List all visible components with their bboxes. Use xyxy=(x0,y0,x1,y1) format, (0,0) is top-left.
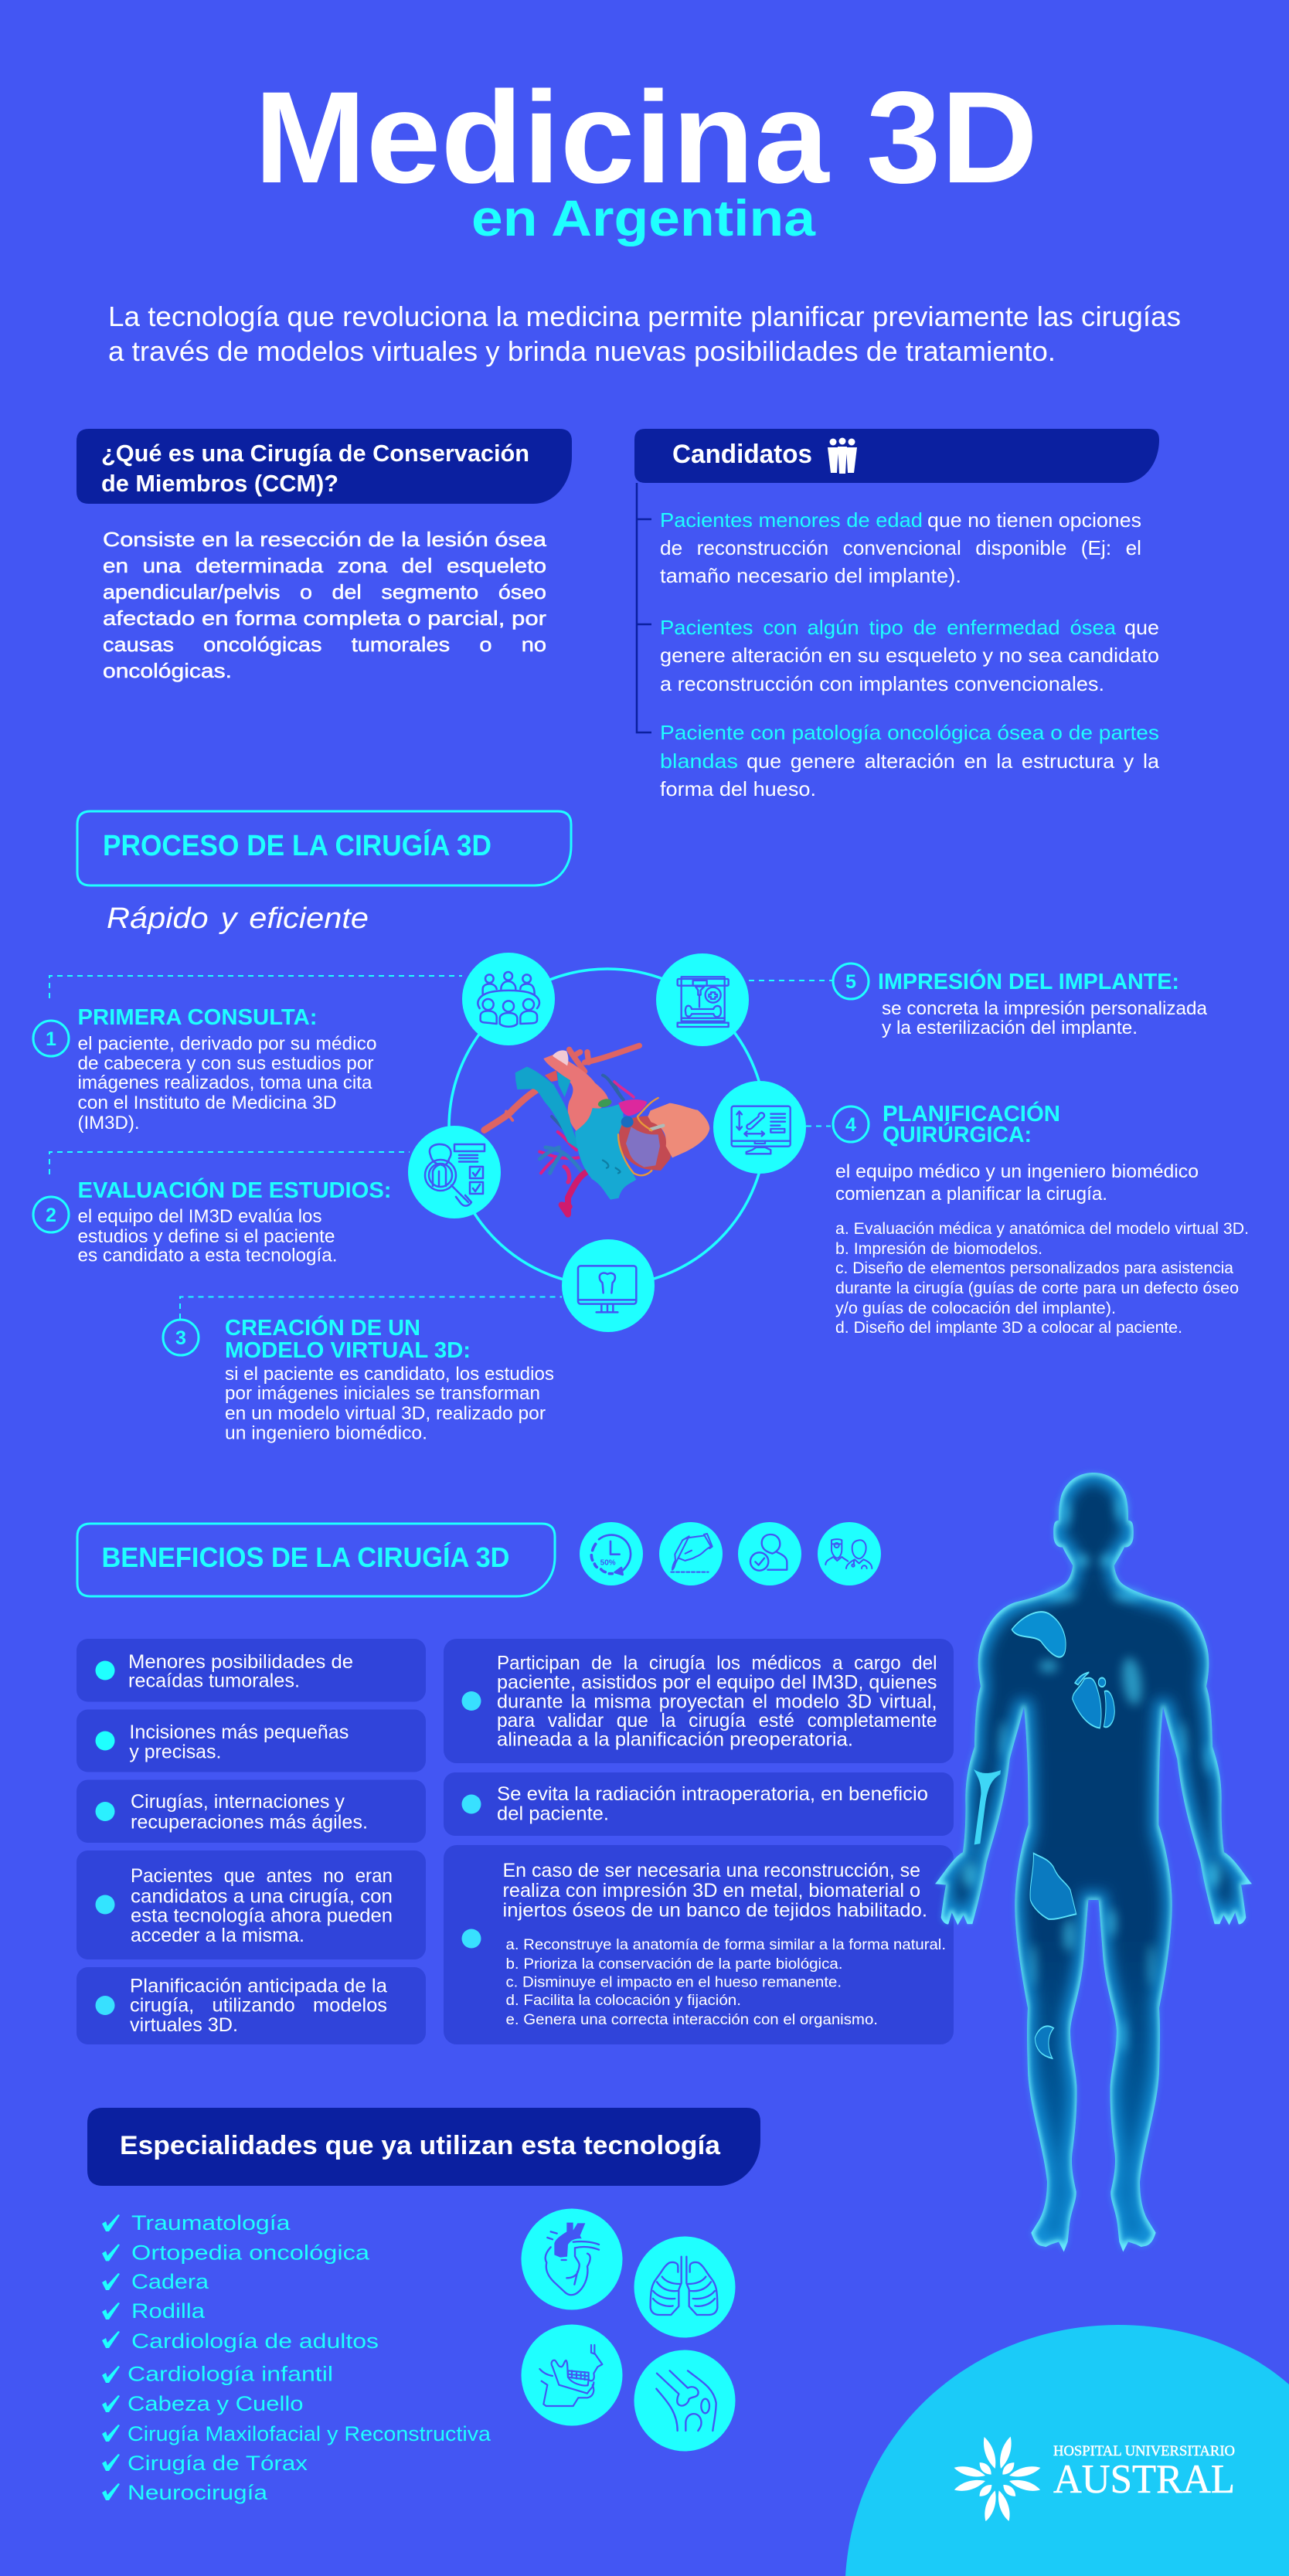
benefit card 6: para validar que la cirugía esté completamente xyxy=(497,1710,937,1731)
benefit card 6: paciente, asistidos por el equipo del IM3D, quienes xyxy=(497,1672,937,1694)
organ: forearm bone xyxy=(974,1769,1001,1844)
benefit card 8: e. Genera una correcta interacción con el organismo. xyxy=(505,2012,878,2028)
step 4 xyxy=(833,1100,1249,1337)
outer glow xyxy=(935,1473,1252,2251)
check xyxy=(102,2244,120,2261)
step list: durante la cirugía (guías de corte para un defecto óseo xyxy=(835,1280,1239,1297)
dark interior xyxy=(935,1473,1252,2251)
icon: people xyxy=(828,437,857,474)
step 5 xyxy=(833,963,1208,1038)
step heading: PLANIFICACIÓN xyxy=(883,1100,1060,1127)
candidate 1: de reconstrucción convencional disponible (Ej: el xyxy=(660,536,1141,559)
definition text: oncológicas. xyxy=(103,659,232,682)
intro text: La tecnología que revoluciona la medicina permite planificar previamente las cirugías xyxy=(108,301,1181,332)
benefit card 1: Menores posibilidades de xyxy=(128,1651,353,1673)
icon: heart specialty xyxy=(521,2208,623,2310)
ring xyxy=(449,969,766,1286)
check xyxy=(102,2395,120,2412)
title: Medicina 3D xyxy=(254,64,1038,210)
specialties list: Cadera xyxy=(131,2270,209,2293)
definition text: afectado en forma completa o parcial, por xyxy=(103,607,546,630)
candidate 1 xyxy=(660,508,1141,587)
benefit card 4: Pacientes que antes no eran xyxy=(131,1865,393,1887)
panel: candidatos xyxy=(634,429,1160,800)
organ: scapula xyxy=(1012,1612,1066,1657)
step list: y/o guías de colocación del implante). xyxy=(835,1300,1116,1317)
number badge xyxy=(833,1106,869,1142)
number badge: 3 xyxy=(175,1327,186,1349)
icon: 50 percent clock: 50% xyxy=(600,1559,616,1568)
heading text xyxy=(101,440,529,497)
number badge xyxy=(833,963,869,999)
benefit card 5: Planificación anticipada de la xyxy=(130,1976,387,1997)
benefit card 8: injertos óseos de un banco de tejidos habilitado. xyxy=(502,1900,927,1922)
organ: heart xyxy=(1073,1672,1114,1728)
step text: estudios y define si el paciente xyxy=(77,1226,335,1247)
step heading: CREACIÓN DE UN xyxy=(225,1314,420,1341)
panel: benefits left column xyxy=(77,1639,426,2044)
step heading: MODELO VIRTUAL 3D: xyxy=(225,1338,471,1363)
step text: con el Instituto de Medicina 3D xyxy=(77,1093,337,1113)
candidate 1: tamaño necesario del implante). xyxy=(660,564,961,587)
organ: pelvis xyxy=(1030,1854,1076,1919)
candidate 2: genere alteración en su esqueleto y no sea candidato xyxy=(660,644,1159,667)
step text xyxy=(835,1161,1199,1205)
icon: doctors xyxy=(818,1522,881,1585)
benefit card 8 xyxy=(444,1845,954,2044)
panel: benefits right column xyxy=(444,1639,954,2044)
muscle highlights xyxy=(962,1495,1221,2052)
benefit card 2: y precisas. xyxy=(129,1742,221,1763)
icon: 50 percent clock xyxy=(580,1522,643,1585)
icon: meeting xyxy=(462,953,555,1045)
definition text: apendicular/pelvis o del segmento óseo xyxy=(103,580,546,603)
step heading: PRIMERA CONSULTA: xyxy=(77,1005,317,1030)
logo text: HOSPITAL UNIVERSITARIO xyxy=(1053,2443,1235,2459)
benefit card 7: Se evita la radiación intraoperatoria, en beneficio xyxy=(497,1783,928,1805)
specialties list: Traumatología xyxy=(131,2211,291,2234)
icon: surgical planning monitor xyxy=(713,1081,806,1174)
step 2 xyxy=(33,1177,392,1266)
step list: c. Diseño de elementos personalizados para asistencia xyxy=(835,1259,1233,1277)
benefit card 4: acceder a la misma. xyxy=(131,1925,304,1946)
benefit card 2 xyxy=(77,1709,426,1772)
step list: a. Evaluación médica y anatómica del modelo virtual 3D. xyxy=(835,1220,1249,1238)
candidate 1: Pacientes menores de edad xyxy=(660,508,923,532)
intro text xyxy=(108,301,1181,367)
benefit card 3 xyxy=(77,1780,426,1843)
benefit card 1: recaídas tumorales. xyxy=(128,1670,300,1692)
number badge: 4 xyxy=(845,1114,856,1136)
step 1 xyxy=(33,1005,377,1133)
step text: y la esterilización del implante. xyxy=(882,1018,1138,1038)
dashed connectors xyxy=(49,976,832,1319)
benefit card 5 xyxy=(77,1967,426,2044)
candidate 2: Pacientes con algún tipo de enfermedad ósea xyxy=(660,616,1117,639)
human body illustration xyxy=(935,1473,1252,2251)
heading: proceso xyxy=(77,811,571,885)
check xyxy=(102,2331,120,2348)
heading: proceso: PROCESO DE LA CIRUGÍA 3D xyxy=(103,828,491,862)
icon: 3D printer xyxy=(656,953,749,1046)
step text xyxy=(77,1206,338,1266)
benefit card 3: recuperaciones más ágiles. xyxy=(131,1812,368,1833)
benefit card 8: realiza con impresión 3D en metal, biomaterial o xyxy=(502,1880,920,1901)
specialties list: Rodilla xyxy=(131,2299,206,2323)
step text: si el paciente es candidato, los estudios xyxy=(225,1364,554,1385)
icon: knee specialty xyxy=(634,2350,736,2451)
specialties list: Ortopedia oncológica xyxy=(131,2241,370,2264)
benefit card 8: En caso de ser necesaria una reconstrucción, se xyxy=(502,1860,920,1881)
candidate 3: que genere alteración en la estructura y la xyxy=(747,749,1160,773)
heading: especialidades: Especialidades que ya utilizan esta tecnología xyxy=(120,2131,721,2160)
benefit card 6: durante la misma proyectan el modelo 3D virtual, xyxy=(497,1691,937,1712)
candidate 2: que xyxy=(1124,616,1159,639)
benefit card 8: d. Facilita la colocación y fijación. xyxy=(505,1993,741,2009)
definition text: Consiste en la resección de la lesión ósea xyxy=(103,528,547,551)
benefit card 7 xyxy=(444,1772,954,1836)
check xyxy=(102,2214,120,2231)
icon: patient check xyxy=(738,1522,801,1585)
candidate 2: a reconstrucción con implantes convencionales. xyxy=(660,672,1104,695)
logo text: AUSTRAL xyxy=(1053,2457,1235,2502)
step heading xyxy=(225,1314,471,1363)
step text: de cabecera y con sus estudios por xyxy=(77,1053,374,1074)
number badge xyxy=(163,1320,199,1355)
benefit card 5: virtuales 3D. xyxy=(130,2014,238,2036)
3D heart model xyxy=(485,1045,709,1215)
step 3 xyxy=(163,1314,554,1443)
step text xyxy=(225,1364,554,1443)
connector bracket xyxy=(637,483,651,732)
intro text: a través de modelos virtuales y brinda nuevas posibilidades de tratamiento. xyxy=(108,335,1056,367)
benefit card 8: a. Reconstruye la anatomía de forma similar a la forma natural. xyxy=(505,1937,946,1953)
icon: evaluation xyxy=(408,1126,501,1218)
step text: el paciente, derivado por su médico xyxy=(77,1034,377,1054)
definition text: en una determinada zona del esqueleto xyxy=(103,554,546,577)
definition text: causas oncológicas tumorales o no xyxy=(103,633,546,656)
check xyxy=(102,2366,120,2383)
step text xyxy=(882,998,1208,1038)
benefit card 7: del paciente. xyxy=(497,1803,609,1825)
number badge: 2 xyxy=(46,1205,56,1226)
icon: lungs specialty xyxy=(634,2236,736,2338)
heading: beneficios: BENEFICIOS DE LA CIRUGÍA 3D xyxy=(102,1541,510,1573)
benefit card 8: c. Disminuye el impacto en el hueso remanente. xyxy=(505,1975,842,1991)
step heading: QUIRÚRGICA: xyxy=(883,1121,1032,1147)
benefit card 3: Cirugías, internaciones y xyxy=(131,1791,345,1813)
heading text: ¿Qué es una Cirugía de Conservación xyxy=(101,440,529,467)
heading box xyxy=(77,429,572,504)
icon: virtual model monitor xyxy=(562,1239,655,1332)
check xyxy=(102,2273,120,2290)
step text: por imágenes iniciales se transforman xyxy=(225,1383,540,1404)
step text xyxy=(77,1034,377,1133)
candidate 3 xyxy=(660,721,1160,800)
mid blue layer xyxy=(935,1473,1252,2251)
benefit card 5: cirugía, utilizando modelos xyxy=(130,1995,387,2017)
check xyxy=(102,2454,120,2471)
candidate 1: que no tienen opciones xyxy=(927,508,1141,532)
icon: jaw specialty xyxy=(521,2324,623,2426)
benefit card 6: alineada a la planificación preoperatoria. xyxy=(497,1729,853,1751)
specialties list xyxy=(102,2211,491,2504)
candidate 3: Paciente con patología oncológica ósea o de partes xyxy=(660,721,1159,744)
corner circle xyxy=(845,2325,1289,2576)
step text: el equipo del IM3D evalúa los xyxy=(77,1206,321,1227)
specialties list: Cirugía Maxilofacial y Reconstructiva xyxy=(128,2422,491,2445)
specialties list: Cardiología infantil xyxy=(128,2363,333,2386)
step text: un ingeniero biomédico. xyxy=(225,1423,427,1443)
number badge: 5 xyxy=(845,971,856,993)
specialties list: Cardiología de adultos xyxy=(131,2330,379,2353)
definition text xyxy=(103,528,547,682)
step list xyxy=(835,1220,1249,1337)
benefit card 4 xyxy=(77,1850,426,1959)
panel: que es CCM xyxy=(77,429,572,682)
candidate 3: blandas xyxy=(660,749,738,773)
bright silhouette edge xyxy=(935,1473,1252,2251)
benefit card 6: Participan de la cirugía los médicos a cargo del xyxy=(497,1653,937,1674)
step text: se concreta la impresión personalizada xyxy=(882,998,1208,1019)
step text: el equipo médico y un ingeniero biomédico xyxy=(835,1161,1199,1182)
subtitle: en Argentina xyxy=(471,189,816,246)
candidate 2 xyxy=(660,616,1159,695)
heading text: Candidatos xyxy=(672,440,812,469)
benefit card 2: Incisiones más pequeñas xyxy=(129,1721,349,1743)
step heading: EVALUACIÓN DE ESTUDIOS: xyxy=(77,1177,392,1203)
specialties list: Neurocirugía xyxy=(128,2481,268,2504)
step text: imágenes realizados, toma una cita xyxy=(77,1072,372,1093)
number badge xyxy=(33,1021,69,1056)
step list: b. Impresión de biomodelos. xyxy=(835,1240,1042,1258)
check xyxy=(102,2483,120,2500)
benefit card 8: b. Prioriza la conservación de la parte biológica. xyxy=(505,1956,842,1973)
step heading: IMPRESIÓN DEL IMPLANTE: xyxy=(878,968,1179,994)
step list: d. Diseño del implante 3D a colocar al paciente. xyxy=(835,1319,1182,1337)
candidate 3: forma del hueso. xyxy=(660,777,816,800)
specialties list: Cirugía de Tórax xyxy=(128,2452,308,2475)
benefit card 1 xyxy=(77,1639,426,1701)
heading box xyxy=(634,429,1159,483)
logo flower xyxy=(953,2435,1042,2523)
number badge xyxy=(33,1197,69,1232)
logo: Hospital Universitario Austral xyxy=(953,2435,1235,2523)
step text: comienzan a planificar la cirugía. xyxy=(835,1184,1107,1205)
benefit card 4: esta tecnología ahora pueden xyxy=(131,1905,393,1927)
check xyxy=(102,2425,120,2442)
check xyxy=(102,2302,120,2319)
step text: es candidato a esta tecnología. xyxy=(77,1246,338,1266)
step text: (IM3D). xyxy=(77,1113,139,1133)
subheading: Rápido y eficiente xyxy=(107,902,369,935)
organ: knee xyxy=(1035,2026,1053,2058)
heading: beneficios xyxy=(77,1524,555,1596)
heading text: de Miembros (CCM)? xyxy=(101,470,338,497)
number badge: 1 xyxy=(46,1028,56,1050)
step text: en un modelo virtual 3D, realizado por xyxy=(225,1403,546,1424)
specialties list: Cabeza y Cuello xyxy=(128,2392,303,2415)
icon: hand signing xyxy=(659,1522,723,1585)
benefit card 6 xyxy=(444,1639,954,1763)
step heading xyxy=(883,1100,1060,1147)
heading: especialidades xyxy=(87,2108,760,2186)
benefit card 4: candidatos a una cirugía, con xyxy=(131,1886,393,1908)
